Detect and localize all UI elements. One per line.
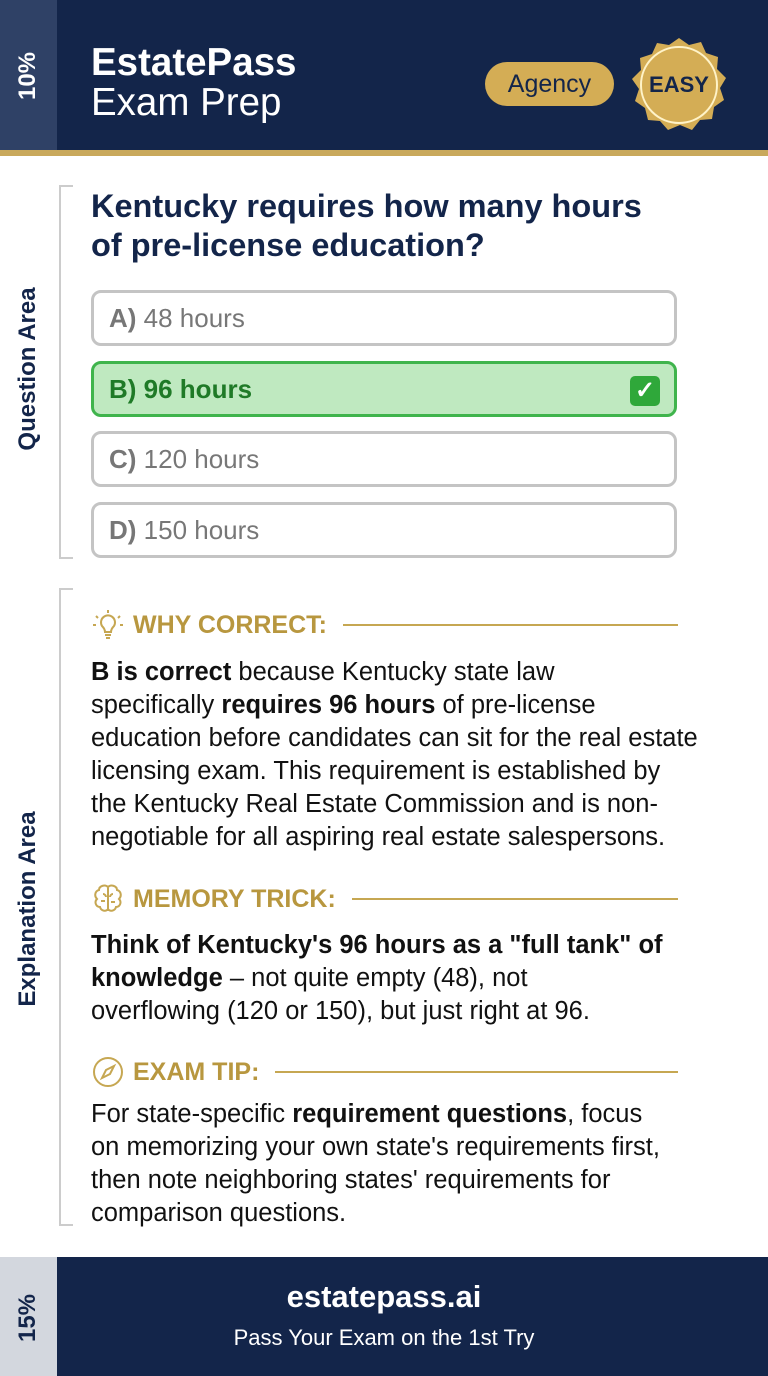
why correct text xyxy=(91,658,698,851)
exam tip text: then note neighboring states' requirements for xyxy=(91,1166,610,1194)
header side strip xyxy=(0,0,57,150)
footer side strip xyxy=(0,1257,57,1376)
exam tip heading: EXAM TIP: xyxy=(133,1058,259,1086)
difficulty badge: EASY xyxy=(649,72,709,97)
agency badge xyxy=(485,62,614,106)
option D: D) 150 hours xyxy=(109,515,259,545)
question area bracket xyxy=(59,185,73,559)
option B correct: ✓ xyxy=(635,377,655,404)
exam tip heading xyxy=(93,1057,678,1087)
memory trick heading: MEMORY TRICK: xyxy=(133,884,336,912)
why correct text: negotiable for all aspiring real estate salespersons. xyxy=(91,823,665,851)
option D xyxy=(91,502,677,558)
why correct text: licensing exam. This requirement is established by xyxy=(91,757,660,785)
why correct text: education before candidates can sit for the real estate xyxy=(91,724,698,752)
why correct text: specifically requires 96 hours of pre-license xyxy=(91,691,596,719)
footer side strip: 15% xyxy=(14,1294,41,1342)
why correct text: the Kentucky Real Estate Commission and is non- xyxy=(91,790,658,818)
memory trick heading xyxy=(94,884,678,912)
exam tip text: For state-specific requirement questions, focus xyxy=(91,1100,642,1128)
brand title xyxy=(91,41,296,124)
brand title: Exam Prep xyxy=(91,81,281,124)
option B correct xyxy=(91,361,677,417)
footer xyxy=(0,1257,768,1376)
memory trick text xyxy=(91,931,663,1025)
option A: A) 48 hours xyxy=(109,303,245,333)
explanation bracket xyxy=(59,588,73,1226)
exam tip text: on memorizing your own state's requirements first, xyxy=(91,1133,660,1161)
agency badge: Agency xyxy=(508,70,591,98)
footer site name: estatepass.ai xyxy=(287,1279,481,1314)
why correct heading: WHY CORRECT: xyxy=(133,610,327,638)
explanation area label: Explanation Area xyxy=(14,811,41,1007)
why correct text: B is correct because Kentucky state law xyxy=(91,658,554,686)
question: of pre-license education? xyxy=(91,227,485,263)
question xyxy=(91,188,642,263)
header side strip: 10% xyxy=(14,52,41,100)
footer tagline: Pass Your Exam on the 1st Try xyxy=(234,1325,534,1350)
question: Kentucky requires how many hours xyxy=(91,188,642,224)
header xyxy=(0,0,768,150)
memory trick text: overflowing (120 or 150), but just right at 96. xyxy=(91,997,590,1025)
option B correct: B) 96 hours xyxy=(109,374,252,404)
memory trick text: Think of Kentucky's 96 hours as a "full tank" of xyxy=(91,931,663,959)
exam tip text: comparison questions. xyxy=(91,1199,346,1227)
option C xyxy=(91,431,677,487)
option A xyxy=(91,290,677,346)
exam tip text xyxy=(91,1100,660,1227)
why correct heading xyxy=(93,610,678,639)
memory trick text: knowledge – not quite empty (48), not xyxy=(91,964,528,992)
difficulty badge xyxy=(632,38,726,130)
option C: C) 120 hours xyxy=(109,444,259,474)
brand title: EstatePass xyxy=(91,41,296,84)
question area label: Question Area xyxy=(14,287,41,451)
gold divider xyxy=(0,150,768,156)
